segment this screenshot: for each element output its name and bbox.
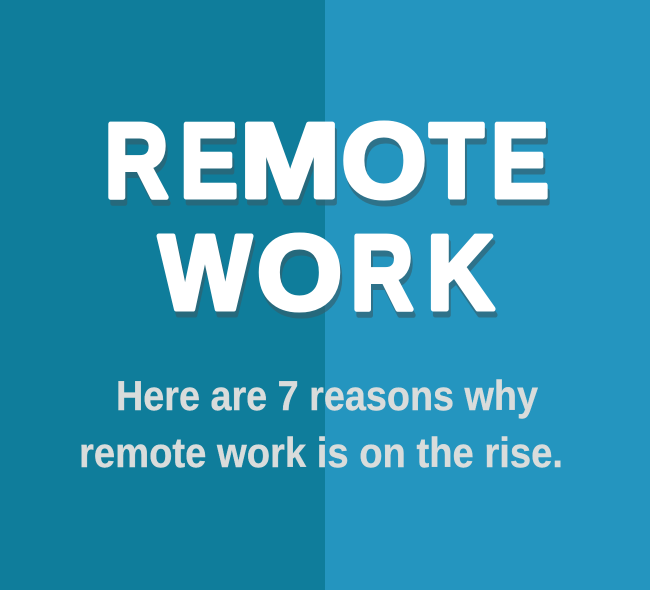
panel: left background [0,0,325,590]
title line: WORK: R [351,213,413,332]
title line: REMOTE: E [180,101,238,220]
title line: REMOTE: T [429,101,484,220]
title line: WORK: K [427,215,494,332]
subtitle line 2: remote work is on the rise. [79,429,563,476]
title line: WORK: O [257,213,342,332]
title line: WORK: W [159,213,252,332]
subtitle [79,372,563,476]
title line: WORK [159,213,494,332]
subtitle line 1: Here are 7 reasons why [116,372,539,419]
title [105,101,549,332]
title line: REMOTE: R [105,101,168,220]
title line: REMOTE [105,101,549,220]
title line: REMOTE: M [240,102,340,220]
title line: REMOTE: O [341,101,427,220]
title line: REMOTE: E [491,101,549,220]
